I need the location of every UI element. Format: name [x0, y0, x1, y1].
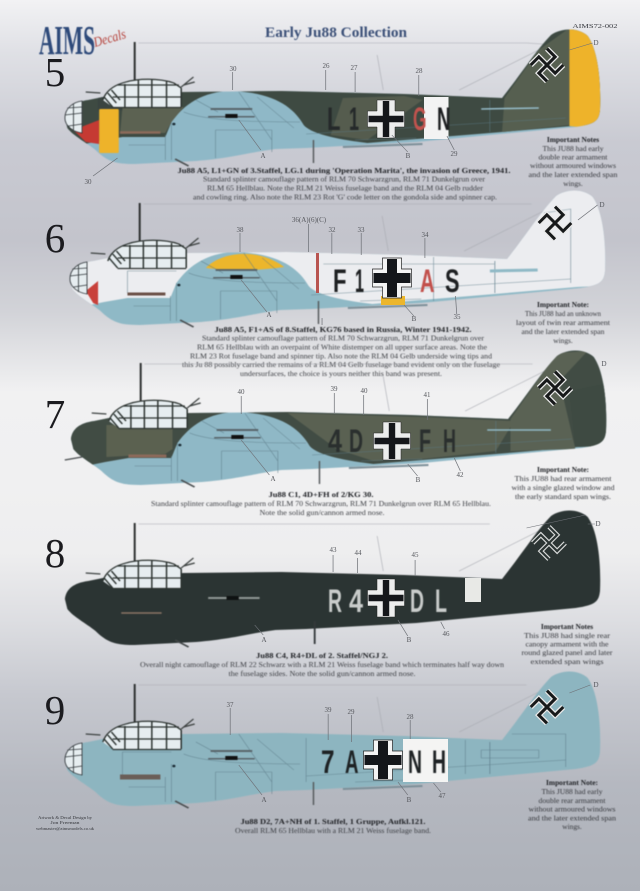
code letters 5: G — [413, 101, 426, 137]
aircraft profile 6 — [68, 190, 606, 328]
fuselage cross 9 — [364, 740, 402, 780]
callout labels 6: A — [266, 311, 272, 319]
caption 9: Ju88 D2, 7A+NH of 1. Staffel, 1 Gruppe, Aufkl.121. — [240, 817, 426, 826]
fuselage band 5 — [424, 97, 448, 139]
callout labels 7 — [238, 360, 607, 484]
callout labels 6: 33 — [358, 226, 365, 234]
important note 8: canopy armament with the — [526, 640, 609, 648]
callout labels 5: 30 — [230, 65, 237, 73]
callout labels 9: 39 — [324, 706, 332, 714]
callout labels 5: 29 — [450, 150, 458, 158]
important note 7: with a single glazed window and — [512, 483, 615, 492]
callout labels 7: 40 — [238, 388, 245, 396]
important note 8 — [522, 622, 613, 666]
callout labels 5: A — [260, 152, 266, 160]
important note 5: wings. — [563, 179, 583, 188]
code letters 8: R — [328, 583, 342, 619]
code letters 5: L — [327, 101, 340, 137]
red fuselage stripe 6 — [316, 253, 319, 293]
important note 6: and the later extended span — [522, 327, 605, 336]
artwork credit — [36, 815, 95, 831]
panel: aircraft 8 — [45, 510, 613, 678]
code letters 8: 4 — [349, 583, 363, 619]
code letters 6 — [333, 263, 460, 299]
number 7: 7 — [45, 391, 65, 437]
important note 5: double rear armament — [538, 152, 609, 162]
callout labels 9: 28 — [406, 713, 414, 721]
caption 6: RLM 23 Rot fuselage band and spinner tip. Also note the RLM 04 Gelb underside wing tips and — [190, 352, 492, 360]
number 5: 5 — [45, 49, 65, 95]
callout labels 7: B — [416, 476, 421, 484]
caption 8: the fuselage sides. Note the solid gun/cannon armed nose. — [228, 669, 416, 678]
logo: AIMS Decals: AIMS — [39, 17, 95, 63]
fin emblem 5 — [531, 49, 563, 81]
fin emblem 9 — [531, 691, 563, 723]
callout labels 5: D — [593, 39, 599, 47]
caption 8: Ju88 C4, R4+DL of 2. Staffel/NGJ 2. — [256, 651, 388, 660]
important note 5 — [528, 135, 618, 188]
panel: aircraft 5 — [45, 15, 618, 202]
caption 7 — [151, 490, 491, 517]
callout labels 8: 44 — [354, 549, 362, 557]
important note 9: This JU88 had early — [542, 787, 603, 796]
callout labels 5: 28 — [416, 67, 423, 75]
code letters 9: 7 — [321, 744, 334, 780]
caption 5: RLM 65 Hellblau. Note the RLM 21 Weiss fuselage band and the RLM 04 Gelb rudder — [207, 184, 483, 192]
panel: aircraft 9 — [36, 672, 616, 835]
important note 8: Important Notes — [541, 622, 593, 631]
aircraft profile 7 — [64, 350, 608, 488]
fin emblem 6 — [539, 207, 571, 239]
caption 7: Ju88 C1, 4D+FH of 2/KG 30. — [268, 490, 374, 499]
product code: AIMS72-002 — [572, 24, 618, 30]
callout labels 8 — [255, 515, 601, 644]
callout labels 9: A — [261, 796, 267, 804]
important note 8: round glazed panel and later — [522, 648, 613, 657]
caption 9: Overall RLM 65 Hellblau with a RLM 21 Weiss fuselage band. — [235, 826, 431, 835]
callout labels 7: 39 — [330, 385, 338, 393]
code letters 6: S — [445, 263, 460, 299]
important note 6 — [516, 300, 611, 345]
callout labels 7: 40 — [360, 387, 368, 395]
callout labels 5: 30 — [84, 178, 92, 186]
callout labels 6: 35 — [454, 313, 461, 321]
important note 9: wings. — [562, 822, 582, 831]
fuselage cross 8 — [368, 579, 404, 617]
important note 5: without armoured windows — [530, 161, 616, 170]
code letters 6: 1 — [355, 263, 364, 299]
caption 7: Standard splinter camouflage pattern of RLM 70 Schwarzgrun, RLM 71 Dunkelgrun over RLM 65 Hellblau. — [151, 499, 491, 508]
callout labels 9 — [226, 681, 599, 804]
callout labels 8: 45 — [412, 551, 419, 559]
important note 7: This JU88 had rear armament — [514, 474, 613, 483]
important note 7: Important Note: — [537, 465, 589, 474]
callout labels 9: 47 — [438, 792, 446, 800]
callout labels 6 — [236, 201, 605, 325]
artwork credit: Jon Freeman — [50, 820, 80, 825]
important note 7 — [512, 465, 615, 501]
panel: aircraft 6 — [45, 176, 617, 378]
code letters 6: A — [420, 263, 434, 299]
callout labels 7: D — [601, 360, 607, 368]
caption 5 — [178, 166, 511, 202]
code letters 5: 1 — [349, 101, 359, 137]
important note 5: This JU88 had early — [542, 144, 604, 153]
fuselage band 9 — [403, 739, 448, 782]
important note 9: and the later extended span — [528, 814, 616, 822]
code letters 5 — [327, 101, 450, 137]
code letters 5: N — [437, 101, 450, 137]
artwork credit: webmaster@aimsmodels.co.uk — [36, 826, 95, 831]
callout labels 6: 36(A)(6)(C) — [292, 216, 327, 224]
callout labels 6: 38 — [236, 226, 244, 234]
caption 8: Overall night camouflage of RLM 22 Schwarz with a RLM 21 Weiss fuselage band which terminates half way down — [140, 660, 504, 669]
important note 5: Important Notes — [547, 135, 599, 144]
fuselage cross 5 — [368, 100, 404, 138]
important note 8: extended span wings — [530, 657, 604, 666]
caption 7: Note the solid gun/cannon armed nose. — [260, 508, 385, 517]
logo: AIMS Decals: Decals — [91, 27, 128, 51]
code letters 9: A — [345, 744, 358, 780]
caption 6: this Ju 88 possibly carried the remains of a RLM 04 Gelb fuselage band evident only on the fuselage — [182, 360, 501, 369]
important note 5: and the later extended span — [528, 170, 618, 179]
callout labels 5: 26 — [322, 62, 330, 70]
code letters 7: H — [443, 423, 456, 459]
callout labels 9: D — [593, 681, 599, 689]
caption 6: Standard splinter camouflage pattern of RLM 70 Schwarzgrun, RLM 71 Dunkelgrun over — [202, 334, 484, 342]
important note 6: This JU88 had an unknown — [525, 309, 601, 318]
callout labels 8: 46 — [442, 630, 450, 638]
code letters 8 — [328, 583, 447, 619]
callout labels 9: B — [407, 796, 412, 804]
callout labels 7: 42 — [456, 471, 464, 479]
important note 8: This JU88 had single rear — [524, 631, 611, 640]
callout labels 5: B — [406, 152, 411, 160]
important note 6: Important Note: — [537, 300, 589, 309]
fuselage cross 6 — [372, 258, 412, 298]
important note 9: without armoured windows — [528, 804, 616, 814]
important note 9: Important Note: — [546, 778, 598, 787]
number 6: 6 — [45, 215, 65, 261]
code letters 7 — [328, 423, 456, 459]
callout labels 9: 29 — [348, 708, 355, 716]
caption 6 — [182, 325, 501, 378]
callout labels 7: 41 — [424, 391, 431, 399]
callout labels 9: 37 — [226, 701, 234, 709]
caption 6: Ju88 A5, F1+AS of 8.Staffel, KG76 based in Russia, Winter 1941-1942. — [214, 325, 472, 334]
code letters 6: F — [333, 263, 346, 299]
caption 9 — [235, 817, 431, 835]
number 8: 8 — [45, 530, 65, 576]
number 9: 9 — [45, 687, 65, 733]
callout labels 6: B — [412, 315, 417, 323]
caption 8 — [140, 651, 504, 678]
fuselage cross 7 — [374, 422, 410, 460]
callout labels 8: A — [261, 636, 267, 644]
important note 7: the early standard span wings. — [515, 492, 611, 501]
fin emblem 8 — [533, 527, 565, 559]
callout labels 6: 32 — [328, 226, 336, 234]
artwork credit: Artwork & Decal Design by — [38, 815, 93, 820]
code letters 8: D — [410, 583, 424, 619]
yellow lower band 6 — [381, 296, 405, 305]
important note 6: layout of twin rear armament — [516, 318, 611, 327]
caption 6: RLM 65 Hellblau with an overpaint of White distemper on all upper surface areas. Note the — [197, 342, 488, 352]
code letters 8: L — [435, 583, 447, 619]
caption 6: undersurfaces, the choice is yours neither this band was present. — [240, 369, 442, 378]
callout labels 6: D — [599, 201, 605, 209]
callout labels 5 — [84, 39, 599, 186]
callout labels 8: B — [407, 636, 412, 644]
callout labels 8: 43 — [330, 546, 337, 554]
important note 9: double rear armament — [538, 796, 606, 805]
aircraft profile 8 — [65, 510, 600, 647]
fin emblem 7 — [539, 372, 571, 404]
code letters 9 — [321, 744, 446, 780]
aircraft profile 5 — [64, 28, 602, 167]
panel: aircraft 7 — [45, 336, 618, 517]
callout labels 7: A — [270, 475, 276, 483]
code letters 7: D — [349, 423, 363, 459]
code letters 9: H — [432, 744, 446, 780]
caption 5: Standard splinter camouflage pattern of RLM 70 Schwarzgrun, RLM 71 Dunkelgrun over — [203, 174, 485, 184]
callout labels 6: 34 — [422, 231, 429, 239]
important note 9 — [528, 778, 616, 831]
caption 5: Ju88 A5, L1+GN of 3.Staffel, LG.1 during 'Operation Marita', the invasion of Greece, 1941. — [178, 166, 511, 175]
important note 6: wings. — [553, 336, 573, 345]
fuselage band 8 — [465, 578, 481, 602]
aircraft profile 9 — [65, 672, 600, 808]
callout labels 5: 27 — [350, 64, 358, 72]
code letters 7: 4 — [328, 423, 342, 459]
code letters 9: N — [408, 744, 422, 780]
title: Early Ju88 Collection — [265, 25, 408, 41]
caption 5: and cowling ring. Also note the RLM 23 Rot 'G' code letter on the gondola side and spinner cap. — [193, 192, 497, 202]
callout labels 8: D — [595, 520, 601, 528]
code letters 7: F — [419, 423, 431, 459]
